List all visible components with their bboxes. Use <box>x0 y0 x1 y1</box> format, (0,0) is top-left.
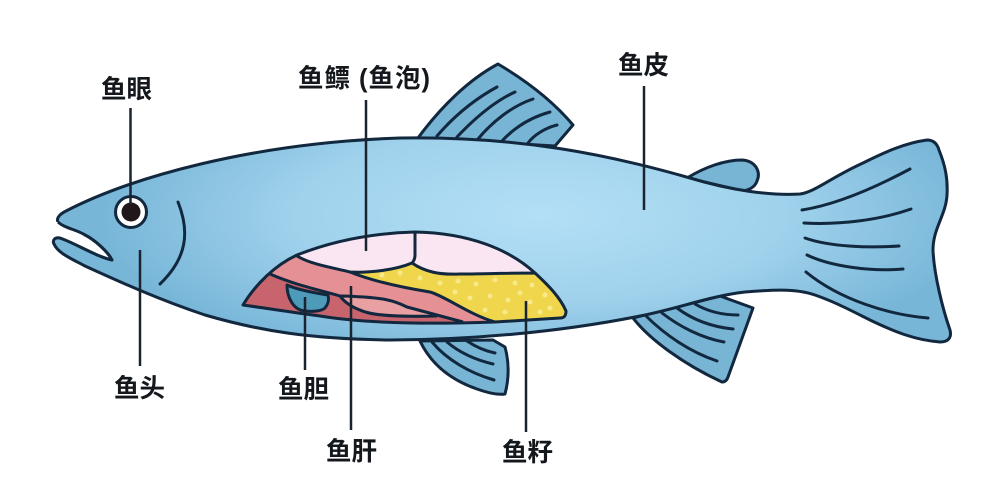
label: swim bladder: 鱼鳔 (鱼泡) <box>298 65 430 93</box>
organ: swim bladder <box>297 232 535 274</box>
mouth opening <box>40 222 112 260</box>
adipose fin <box>687 160 758 191</box>
label: eye: 鱼眼 <box>101 76 152 104</box>
pelvic fin <box>420 340 508 394</box>
leader lines <box>130 86 644 432</box>
label: skin: 鱼皮 <box>618 52 669 80</box>
organ: dark red cavity base <box>243 232 566 323</box>
organ: roe <box>350 263 566 322</box>
label: gallbladder: 鱼胆 <box>278 376 329 404</box>
gallbladder <box>287 285 329 311</box>
roe dots <box>380 270 552 314</box>
organ: liver <box>270 256 495 322</box>
fish body and tail <box>40 138 951 342</box>
organ outlines <box>243 232 566 323</box>
dorsal fin <box>418 64 573 146</box>
icon: fish eye <box>116 196 146 228</box>
tail rays <box>802 169 928 318</box>
anal fin <box>633 296 753 382</box>
organ: liver lower lobe <box>340 296 437 316</box>
label: head: 鱼头 <box>114 375 165 403</box>
body cavity organs <box>243 232 566 323</box>
label: liver: 鱼肝 <box>326 438 377 466</box>
label: roe: 鱼籽 <box>502 439 553 467</box>
gill cover <box>160 202 185 284</box>
